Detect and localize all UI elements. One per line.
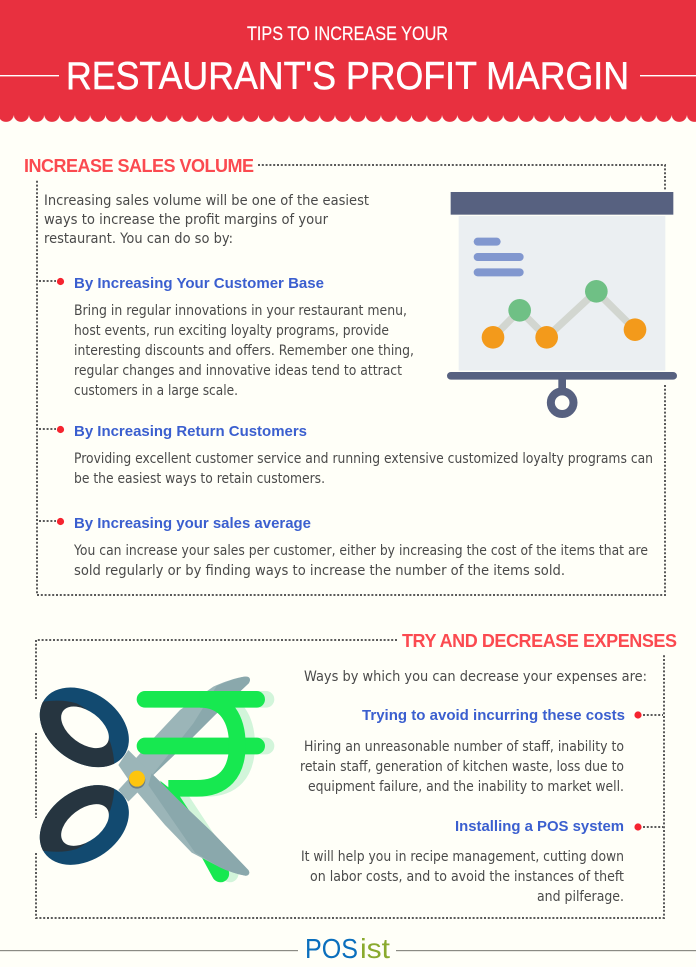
tip: customer base: By Increasing Your Customer Base: [74, 275, 324, 292]
tip: POS system: on labor costs, and to avoid the instances of theft: [310, 869, 624, 885]
tip: POS system: [301, 818, 663, 905]
tip: sales average: By Increasing your sales average: [74, 515, 311, 532]
tip: POS system: It will help you in recipe management, cutting down: [301, 849, 624, 865]
intro text: restaurant. You can do so by:: [44, 231, 233, 247]
panel: increase sales volume: [24, 156, 665, 595]
tip: avoid costs: equipment failure, and the inability to market well.: [308, 779, 624, 795]
footer rule: [0, 950, 696, 951]
tip: customer base: [39, 275, 414, 399]
header banner: [0, 0, 696, 122]
tip: POS system: and pilferage.: [537, 889, 624, 905]
title kicker: TIPS TO INCREASE YOUR: [247, 24, 448, 45]
tip: POS system: Installing a POS system: [455, 818, 624, 835]
tip: customer base: host events, run exciting loyalty programs, provide: [74, 323, 389, 339]
intro text: Ways by which you can decrease your expenses are:: [304, 669, 647, 685]
tip: customer base: Bring in regular innovations in your restaurant menu,: [74, 303, 407, 319]
icon: scissors cutting rupee sign: [25, 671, 266, 882]
tip: customer base: regular changes and innovative ideas tend to attract: [74, 363, 402, 379]
main title: RESTAURANT'S PROFIT MARGIN: [66, 55, 629, 98]
tip: avoid costs: Hiring an unreasonable number of staff, inability to: [304, 739, 624, 755]
intro text: ways to increase the profit margins of your: [44, 212, 328, 228]
section heading: TRY AND DECREASE EXPENSES: [402, 631, 677, 651]
intro text: Increasing sales volume will be one of the easiest: [44, 193, 369, 209]
tip: customer base: interesting discounts and offers. Remember one thing,: [74, 343, 414, 359]
logo: POSist: ist: [360, 933, 390, 964]
tip: return customers: be the easiest ways to retain customers.: [74, 471, 325, 487]
intro text: [44, 193, 369, 247]
tip: return customers: [39, 423, 653, 487]
tip: avoid costs: [300, 707, 663, 795]
icon: presentation screen with line chart: [447, 192, 677, 414]
tip: sales average: [39, 515, 648, 579]
section heading: INCREASE SALES VOLUME: [24, 156, 254, 176]
logo: POSist: [305, 933, 390, 964]
tip: avoid costs: Trying to avoid incurring these costs: [362, 707, 625, 724]
tip: return customers: By Increasing Return Customers: [74, 423, 307, 440]
tip: avoid costs: retain staff, generation of kitchen waste, loss due to: [300, 759, 624, 775]
tip: sales average: sold regularly or by finding ways to increase the number of the items sold.: [74, 563, 565, 579]
tip: customer base: customers in a large scale.: [74, 383, 238, 399]
panel: try and decrease expenses: [36, 631, 677, 918]
logo: POSist: POS: [305, 933, 358, 964]
